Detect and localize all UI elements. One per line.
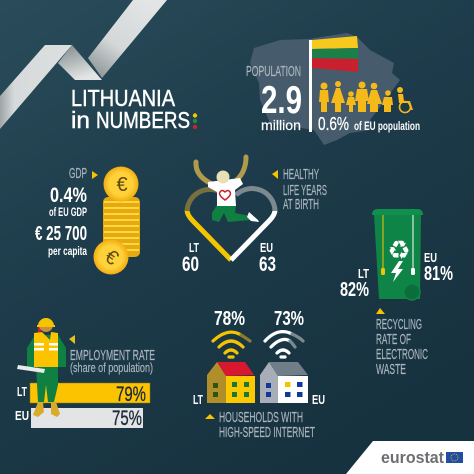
employment label <box>70 348 155 375</box>
arrow: employment <box>69 335 75 344</box>
internet values: 78% <box>214 308 245 330</box>
employment bars: 75% <box>112 407 142 430</box>
recycling label: ELECTRONIC <box>376 347 428 363</box>
employment bars: LT <box>17 384 27 399</box>
recycling values: 81% <box>424 263 453 285</box>
icon: people <box>319 81 413 112</box>
icon: recycling bin: ♻ <box>387 235 411 265</box>
internet labels: LT <box>193 392 203 407</box>
icon: jumping figure <box>196 157 259 222</box>
arrow: GDP <box>92 171 98 179</box>
GDP text: € 25 700 <box>35 223 87 245</box>
icon: coin stack <box>94 166 140 274</box>
employment label: (share of population) <box>70 360 153 375</box>
icon: worker <box>17 318 66 417</box>
title: in <box>71 107 90 133</box>
recycling label: RATE OF <box>376 332 411 348</box>
employment bars <box>15 383 150 430</box>
population text: 2.9 <box>261 79 302 122</box>
map of Lithuania <box>250 33 400 145</box>
employment bars: EU <box>15 408 29 423</box>
arrow: internet <box>205 414 215 419</box>
healthy life years values: 60 <box>182 253 199 276</box>
healthy life years heart chart <box>187 189 275 260</box>
icon: recycling bin <box>372 209 423 300</box>
ribbon graphic <box>0 0 167 129</box>
recycling label: WASTE <box>376 362 406 378</box>
recycling label <box>376 317 428 378</box>
population text: million <box>261 117 301 133</box>
recycling values: 82% <box>340 279 369 301</box>
population text: 0.6% <box>318 114 349 134</box>
internet labels: EU <box>312 392 325 407</box>
arrow: healthy life years <box>272 170 278 179</box>
healthy life years label: LIFE YEARS <box>283 183 327 199</box>
footer logo <box>346 441 474 474</box>
icon: house LT <box>207 362 255 403</box>
GDP text <box>35 166 87 258</box>
employment label: EMPLOYMENT RATE <box>70 348 155 364</box>
recycling label: RECYCLING <box>376 317 422 333</box>
footer logo: eurostat <box>381 448 444 467</box>
healthy life years values <box>182 240 276 276</box>
internet description: HIGH-SPEED INTERNET <box>219 425 315 441</box>
healthy life years values: EU <box>260 240 273 255</box>
employment bars: 79% <box>116 383 146 406</box>
healthy life years label: HEALTHY <box>283 167 319 183</box>
recycling values: LT <box>358 266 369 281</box>
icon: house EU <box>260 362 308 403</box>
population text <box>246 64 420 134</box>
icon: wifi LT <box>213 332 250 357</box>
flag <box>309 36 358 132</box>
title <box>71 85 197 133</box>
internet values <box>214 308 304 330</box>
healthy life years label: AT BIRTH <box>283 197 319 213</box>
GDP text: 0.4% <box>50 184 87 207</box>
recycling values: EU <box>424 250 437 265</box>
GDP text: per capita <box>48 244 87 258</box>
arrow: recycling <box>376 308 385 314</box>
internet description: HOUSEHOLDS WITH <box>219 410 303 426</box>
internet labels <box>193 392 325 407</box>
icon: wifi EU <box>265 332 303 357</box>
GDP text: of EU GDP <box>49 205 87 219</box>
population text: POPULATION <box>246 64 301 80</box>
healthy life years label <box>283 167 327 213</box>
icon: coin stack: € <box>101 246 122 270</box>
recycling values <box>340 250 453 301</box>
title: NUMBERS <box>96 107 190 133</box>
icon: coin stack: € <box>116 174 128 196</box>
healthy life years values: LT <box>189 240 199 255</box>
internet description <box>219 410 315 441</box>
population text: of EU population <box>354 119 420 133</box>
internet values: 73% <box>274 308 304 330</box>
GDP text: GDP <box>69 166 87 182</box>
healthy life years values: 63 <box>259 253 276 276</box>
title: LITHUANIA <box>71 85 176 111</box>
